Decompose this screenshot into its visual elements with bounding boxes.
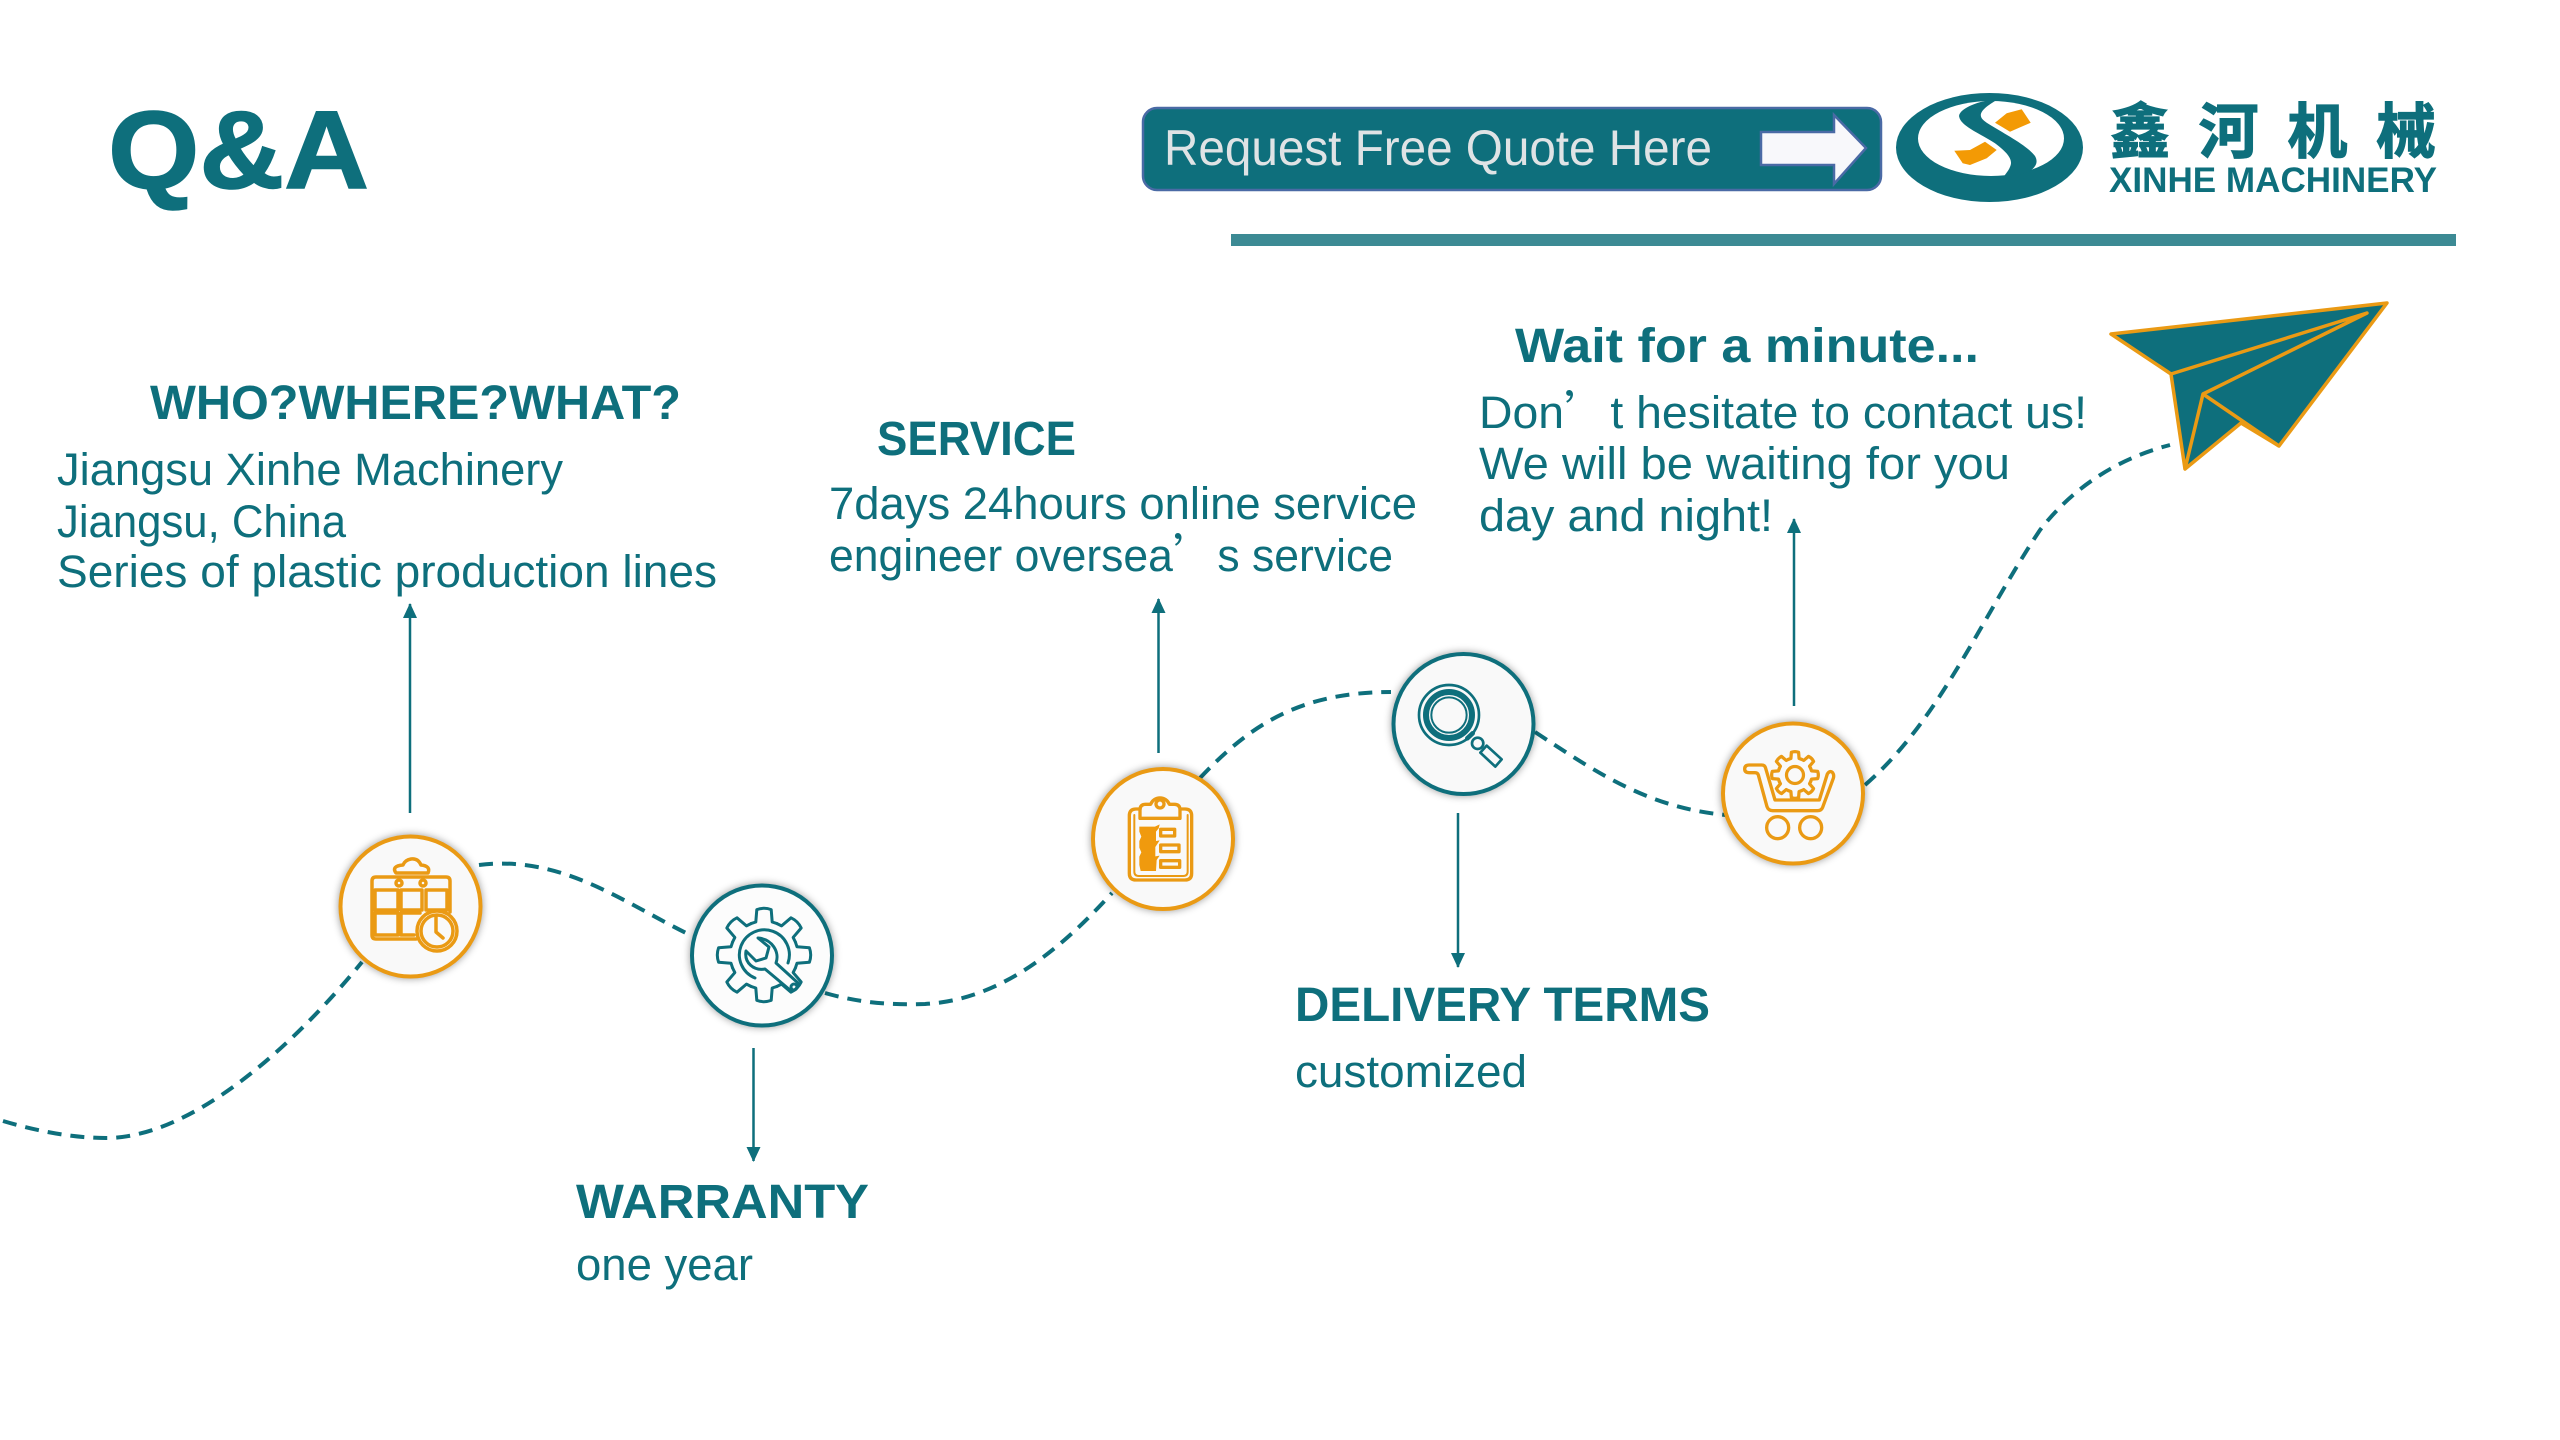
icon: checklist clipboard [1093, 769, 1233, 909]
dashed path [3, 445, 2170, 1138]
text block: day and night! [1479, 490, 1773, 541]
arrow up [1157, 599, 1160, 753]
icon: button arrow [1761, 115, 1866, 184]
button: request free quote [1143, 108, 1881, 190]
step 2: warranty [576, 886, 869, 1290]
heading: Wait for a minute... [1515, 320, 1979, 373]
icon: gear and wrench [692, 886, 832, 1026]
heading: SERVICE [877, 413, 1076, 466]
step 4: delivery terms [1295, 654, 1710, 1097]
text block: customized [1295, 1046, 1527, 1097]
text block [57, 444, 717, 597]
logo chinese name: 鑫河机械 [2110, 84, 2436, 171]
icon: cart with gear [1723, 724, 1863, 864]
arrow down [752, 1048, 755, 1161]
text block: Series of plastic production lines [57, 546, 717, 597]
logo: Xinhe Machinery [1896, 84, 2437, 202]
heading: WHO?WHERE?WHAT? [150, 377, 681, 430]
text block: Don’t hesitate to contact us! [1479, 376, 2087, 441]
text block: one year [576, 1239, 753, 1290]
title: Q&A [108, 89, 369, 212]
logo english name: XINHE MACHINERY [2109, 161, 2437, 200]
heading: DELIVERY TERMS [1295, 979, 1710, 1032]
icon: calendar and clock [340, 836, 480, 976]
arrow up [1793, 519, 1795, 706]
arrow up [409, 604, 411, 813]
icon: magnifier [1394, 654, 1534, 794]
icon: paper plane [2111, 303, 2387, 469]
text block: 7days 24hours online service [829, 478, 1417, 529]
step 3: service [829, 413, 1417, 909]
header rule [1231, 234, 2456, 246]
arrow down [1457, 813, 1459, 967]
text block: Jiangsu Xinhe Machinery [57, 444, 564, 495]
text block: engineer oversea’s service [829, 519, 1393, 584]
text block: Jiangsu, China [57, 496, 347, 547]
step 1: who where what [57, 377, 717, 976]
button: request free quote: Request Free Quote Here [1164, 120, 1712, 176]
checklist marks [1139, 824, 1160, 871]
step 5: wait for a minute [1479, 320, 2087, 864]
text block: We will be waiting for you [1479, 438, 2010, 489]
text block [1479, 376, 2087, 541]
heading: WARRANTY [576, 1176, 869, 1229]
text block [829, 478, 1417, 584]
